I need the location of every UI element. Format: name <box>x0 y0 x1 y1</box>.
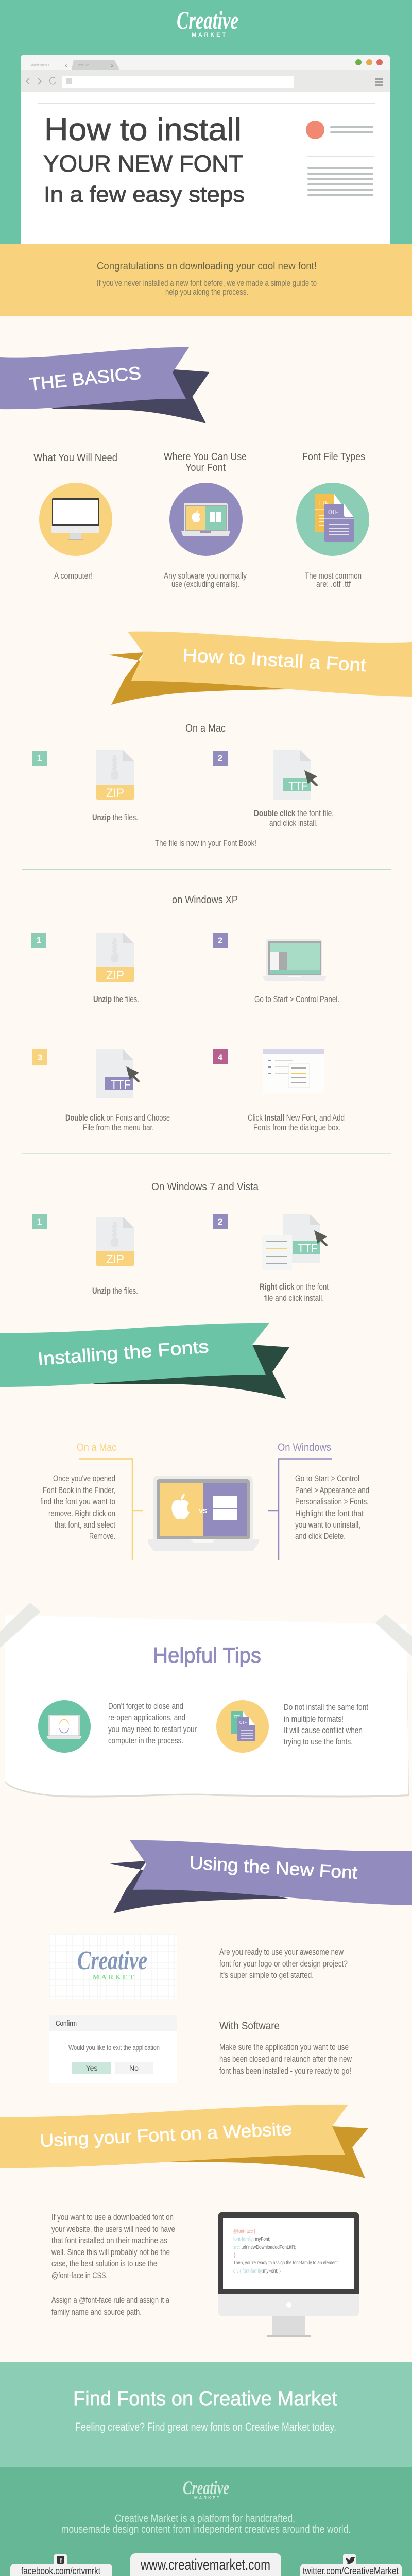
browser window: x <box>65 63 67 68</box>
step 4 badge: 4 <box>218 1053 223 1062</box>
column: where you can use your font <box>164 451 247 589</box>
with software text <box>219 2020 352 2076</box>
section: windows xp: on Windows XP <box>172 894 238 906</box>
footer logo: Creative <box>183 2478 229 2499</box>
icon: laptop with start menu <box>263 939 327 981</box>
website instructions text: that font installed on their machine as <box>52 2236 167 2245</box>
icon: laptop with mac and windows <box>181 503 230 536</box>
section: windows 7 and vista <box>32 1181 329 1303</box>
step 3 caption: File from the menu bar. <box>83 1123 154 1132</box>
logo: Creative Market <box>177 6 238 38</box>
banner: how to install a font <box>108 632 412 705</box>
step 1 badge <box>31 933 46 948</box>
with software text: has been closed and relaunch after the new <box>219 2055 352 2064</box>
column: font file types <box>296 451 369 589</box>
using the font intro text: It's super simple to get started. <box>219 1971 314 1980</box>
mac instructions: Once you've opened <box>53 1474 115 1483</box>
tip: formats: trying to use the fonts. <box>284 1737 353 1747</box>
website instructions text: family name and source path. <box>52 2308 142 2317</box>
step 2 badge <box>213 933 228 948</box>
banner: using your font on a website <box>0 2105 368 2178</box>
icon: computer <box>52 498 99 540</box>
confirm dialog <box>49 2015 177 2083</box>
with software text: With Software <box>219 2020 280 2032</box>
icon: zip file <box>96 1217 134 1266</box>
footer description: mousemade design content from independent creatives around the world. <box>61 2523 351 2535</box>
section: windows xp <box>31 894 345 1132</box>
step 1 caption: Unzip the files. <box>93 995 139 1004</box>
code text: src: url('newDownloadedFont.ttf'); <box>233 2244 296 2250</box>
tip: formats: Do not install the same font <box>284 1703 368 1712</box>
intro band: If you've never installed a new font before, we've made a simple guide to <box>97 279 317 288</box>
icon: ttf and otf files <box>315 494 354 542</box>
column: font file types: The most common <box>305 571 362 581</box>
column: where you can use your font: Where You Can Use <box>164 451 247 463</box>
step 4 caption <box>248 1113 345 1132</box>
step 1 badge: 1 <box>37 753 42 763</box>
step 2 badge: 2 <box>218 1217 222 1227</box>
logo design preview: Creative <box>77 1946 147 1975</box>
mac instructions: find the font you want to <box>40 1497 115 1506</box>
icon: zip file <box>96 750 134 800</box>
column: what you will need: What You Will Need <box>33 452 117 464</box>
banner: using the new font: Using the New Font <box>189 1853 358 1883</box>
browser window: Google fonts + <box>30 64 49 67</box>
tip: formats: in multiple formats! <box>284 1715 344 1724</box>
banner: using the new font <box>110 1840 412 1913</box>
icon: ttf file with cursor <box>273 750 318 800</box>
section: uninstall windows <box>268 1442 369 1560</box>
mac instructions: remove. Right click on <box>48 1509 115 1518</box>
banner: using your font on a website: Using your Font on a Website <box>40 2119 293 2151</box>
header panel <box>0 0 412 244</box>
windows instructions: Panel > Appearance and <box>295 1486 369 1495</box>
website instructions text: case, the best solution is to use the <box>52 2259 157 2268</box>
step 1 badge <box>32 1214 47 1229</box>
mac instructions: Remove. <box>89 1532 115 1541</box>
using the font intro text <box>219 1947 348 1980</box>
section: windows 7 and vista: On Windows 7 and Vista <box>151 1181 259 1193</box>
website instructions text <box>51 2213 175 2317</box>
column: what you will need: A computer! <box>54 571 93 581</box>
icon: ttf and otf files: TTF <box>318 499 329 507</box>
title: How to install <box>44 112 242 147</box>
font book note: The file is now in your Font Book! <box>155 839 256 848</box>
step 3 caption: Double click on Fonts and Choose <box>65 1113 170 1123</box>
footer description <box>61 2513 351 2535</box>
footer description: Creative Market is a platform for handcrafted, <box>115 2513 295 2524</box>
tip: restart: computer in the process. <box>108 1736 183 1745</box>
icon: zip file: ZIP <box>106 969 124 982</box>
icon: ttf file with cursor: TTF <box>288 779 308 792</box>
step 1 badge <box>32 751 47 766</box>
icon: zip file: ZIP <box>106 1252 124 1266</box>
facebook link <box>10 2554 112 2576</box>
icon: zip file <box>96 933 134 982</box>
bracket: windows <box>268 1459 332 1560</box>
column: where you can use your font: Any software you normally <box>164 571 247 581</box>
banner: the basics <box>0 347 210 423</box>
using the font intro text: font for your logo or other design project? <box>219 1959 348 1969</box>
website instructions text: Assign a @font-face rule and assign it a <box>52 2296 170 2305</box>
column: font file types: Font File Types <box>302 451 365 463</box>
confirm dialog: Confirm <box>56 2019 77 2028</box>
with software text: Make sure the application you want to use <box>219 2043 349 2052</box>
mac instructions: Font Book in the Finder, <box>43 1486 115 1495</box>
sidebar wireframe <box>306 121 374 206</box>
step 3 badge <box>32 1049 47 1065</box>
banner: installing the fonts <box>0 1323 289 1399</box>
icon: ttf and otf files: OTF <box>328 508 338 516</box>
step 1 badge: 1 <box>37 935 41 945</box>
website instructions text: If you want to use a downloaded font on <box>52 2213 174 2222</box>
step 2 caption: Go to Start > Control Panel. <box>254 995 339 1004</box>
step 1 caption: Unzip the files. <box>92 813 138 822</box>
logo design preview <box>49 1934 177 1999</box>
step 4 caption: Fonts from the dialogue box. <box>253 1123 341 1132</box>
tip: formats: It will cause conflict when <box>284 1726 363 1735</box>
windows instructions: Go to Start > Control <box>295 1474 359 1483</box>
windows instructions <box>295 1474 369 1541</box>
step 3 caption <box>65 1113 170 1132</box>
monitor with css code <box>218 2212 359 2337</box>
step 2 caption: file and click install. <box>264 1294 324 1303</box>
title <box>43 112 245 207</box>
footer logo <box>183 2478 229 2500</box>
icon: ttf file with context menu <box>262 1214 328 1270</box>
section: on a mac <box>32 723 334 848</box>
intro band: help you along the process. <box>165 287 248 297</box>
title: In a few easy steps <box>44 182 245 207</box>
tip: restart: Don't forget to close and <box>108 1702 183 1711</box>
step 3 badge: 3 <box>38 1053 42 1062</box>
code text: Then, you're ready to assign the font-family to an element. <box>233 2260 339 2266</box>
icon: zip file: ZIP <box>106 786 124 800</box>
bracket: mac <box>79 1459 143 1560</box>
code text: font-family: myFont; <box>233 2236 270 2242</box>
heading: Helpful Tips <box>153 1643 261 1667</box>
tip: restart <box>38 1700 197 1753</box>
browser window: New Tab <box>78 64 89 67</box>
section: uninstall mac: On a Mac <box>77 1442 116 1453</box>
confirm dialog: Yes <box>86 2064 97 2072</box>
call to action band: Feeling creative? Find great new fonts on Creative Market today. <box>75 2420 336 2433</box>
footer logo: MARKET <box>194 2496 219 2500</box>
column: what you will need <box>33 452 117 581</box>
browser window: x <box>111 63 113 68</box>
tape <box>0 1603 412 1656</box>
section: uninstall mac <box>40 1442 143 1560</box>
code text: } <box>234 2252 236 2258</box>
code text: div { font-family:myFont; } <box>233 2268 281 2274</box>
step 2 caption: and click install. <box>269 819 318 828</box>
tip: restart: re-open applications, and <box>108 1713 185 1722</box>
step 1 badge: 1 <box>37 1217 42 1227</box>
tip: formats: TTF <box>234 1715 240 1719</box>
mac instructions: that font, and select <box>55 1520 115 1530</box>
banner: installing the fonts: Installing the Fonts <box>37 1336 210 1369</box>
icon: mac vs windows laptop <box>148 1476 259 1551</box>
call to action band <box>0 2362 412 2467</box>
code text: @font-face { <box>233 2228 255 2234</box>
banner: how to install a font: How to Install a Font <box>182 645 367 675</box>
tip: restart: you may need to restart your <box>108 1725 197 1734</box>
icon: dialog window <box>263 1049 324 1093</box>
browser window <box>21 55 390 244</box>
website link: www.creativemarket.com <box>140 2556 270 2573</box>
code text <box>233 2228 339 2274</box>
column: where you can use your font: Your Font <box>185 462 226 473</box>
icon: ttf file with cursor: TTF <box>111 1078 130 1091</box>
with software text: font has been installed - you're ready to go! <box>219 2066 351 2076</box>
logo design preview: MARKET <box>93 1974 134 1981</box>
intro band <box>0 244 412 316</box>
panel: helpful tips <box>0 1603 412 1798</box>
confirm dialog: Would you like to exit the application <box>68 2043 160 2052</box>
twitter link <box>300 2554 402 2576</box>
tip: formats <box>216 1700 368 1753</box>
step 2 badge <box>213 1214 228 1229</box>
website instructions text: your website, the users will need to have <box>52 2225 175 2234</box>
column: font file types: are: .otf .ttf <box>316 580 351 589</box>
step 2 badge <box>213 751 228 766</box>
icon: ttf file with context menu: TTF <box>298 1242 317 1255</box>
website link <box>130 2553 281 2576</box>
step 1 caption: Unzip the files. <box>92 1286 138 1296</box>
tip: formats: OTF <box>239 1720 247 1725</box>
windows instructions: Personalisation > Fonts. <box>295 1497 369 1506</box>
section: uninstall windows: On Windows <box>278 1442 331 1453</box>
facebook link: f <box>60 2556 62 2565</box>
icon: ttf file with cursor <box>96 1049 140 1098</box>
column: where you can use your font: use (excluding emails). <box>171 580 239 589</box>
website instructions text: well. Since this will probably not be the <box>51 2248 170 2257</box>
intro band: Congratulations on downloading your cool new font! <box>97 261 317 272</box>
call to action band: Find Fonts on Creative Market <box>73 2387 337 2410</box>
website instructions text: @font-face in CSS. <box>52 2271 108 2280</box>
windows instructions: you want to uninstall, <box>295 1520 360 1530</box>
step 2 badge: 2 <box>218 936 222 945</box>
step 2 badge: 2 <box>218 753 222 763</box>
windows instructions: and click Delete. <box>295 1532 346 1541</box>
footer <box>0 2467 412 2576</box>
section: on a mac: On a Mac <box>185 723 226 734</box>
logo: Creative Market: Creative <box>177 6 238 35</box>
step 2 caption: Double click the font file, <box>254 809 334 818</box>
title: YOUR NEW FONT <box>43 150 243 177</box>
step 2 caption <box>260 1282 329 1303</box>
step 4 badge <box>213 1049 228 1064</box>
using the font intro text: Are you ready to use your awesome new <box>219 1947 344 1957</box>
step 4 caption: Click Install New Font, and Add <box>248 1113 345 1123</box>
mac instructions <box>40 1474 115 1541</box>
windows instructions: Highlight the font that <box>295 1509 364 1518</box>
step 2 caption <box>254 809 334 828</box>
icon: mac vs windows laptop: VS <box>199 1507 207 1515</box>
step 2 caption: Right click on the font <box>260 1282 329 1292</box>
confirm dialog: No <box>129 2064 139 2072</box>
logo: Creative Market: MARKET <box>192 32 226 38</box>
banner: the basics: THE BASICS <box>28 363 142 395</box>
